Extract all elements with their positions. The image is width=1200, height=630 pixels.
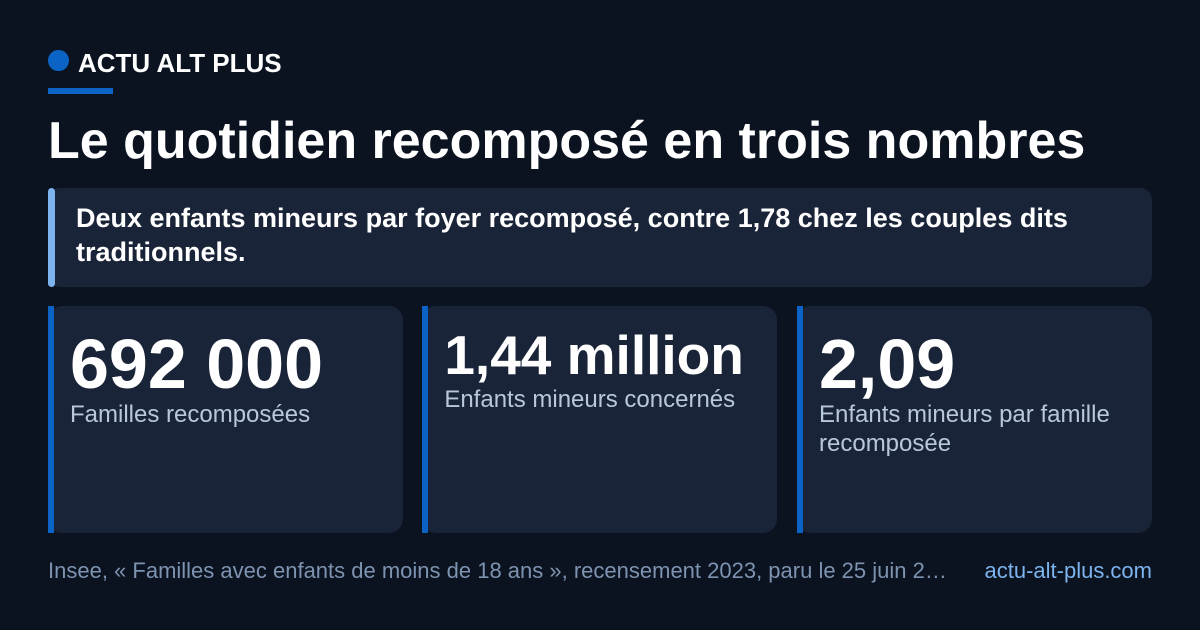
stat label: Enfants mineurs concernés [444, 386, 735, 413]
panel: enfants mineurs concernés [422, 306, 777, 533]
callout background [48, 188, 1152, 287]
callout text [76, 203, 1068, 267]
stat label: Familles recomposées [70, 401, 310, 428]
panel: enfants par famille [797, 306, 1152, 533]
callout text: Deux enfants mineurs par foyer recomposé, contre 1,78 chez les couples dits [76, 203, 1068, 233]
card background [422, 306, 777, 532]
card background [48, 306, 403, 532]
brand name: ACTU ALT PLUS [78, 48, 282, 78]
card background [797, 306, 1152, 532]
stat label: recomposée [819, 430, 951, 457]
callout [48, 188, 1152, 287]
source note: Insee, « Familles avec enfants de moins de 18 ans », recensement 2023, paru le 25 juin 2… [48, 558, 947, 583]
title: Le quotidien recomposé en trois nombres [48, 112, 1085, 170]
brand header [48, 48, 282, 94]
stat label [819, 401, 1110, 457]
accent bar [797, 306, 803, 532]
stat label: Enfants mineurs par famille [819, 401, 1110, 428]
accent bar [48, 306, 54, 532]
stat number: 1,44 million [444, 324, 744, 386]
accent bar [422, 306, 428, 532]
callout accent bar [48, 188, 54, 287]
icon: brand dot [48, 50, 68, 70]
stat number: 2,09 [819, 325, 955, 403]
callout text: traditionnels. [76, 237, 246, 267]
stat number: 692 000 [70, 325, 323, 403]
site link: actu-alt-plus.com [984, 558, 1152, 583]
brand underline [48, 88, 112, 94]
panel: familles recomposées [48, 306, 403, 533]
